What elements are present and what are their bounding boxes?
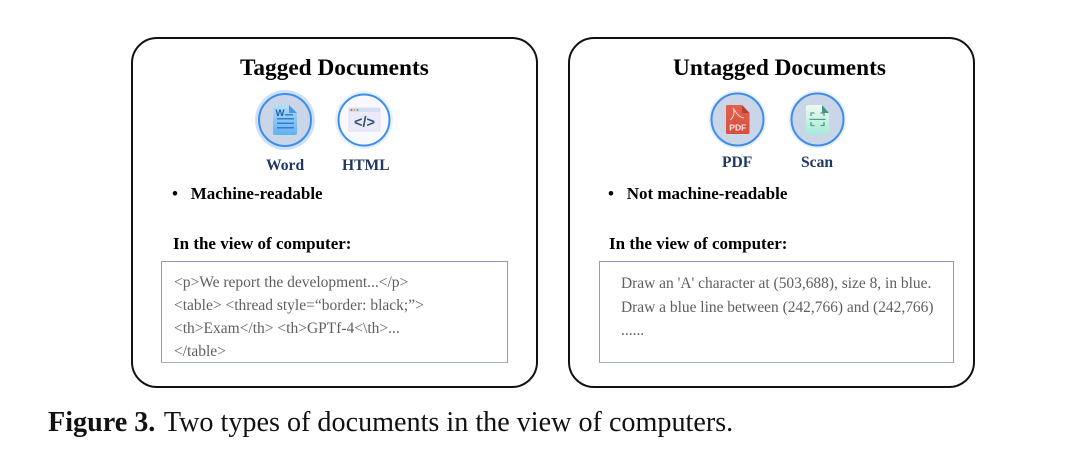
- icon: word: W: [276, 108, 284, 119]
- icon: html: [335, 91, 393, 149]
- bullet: machine-readable: • Machine-readable: [172, 184, 323, 203]
- code text: tagged: <table> <thread style=“border: black;”>: [174, 297, 424, 314]
- label: scan: Scan: [801, 154, 833, 171]
- panel: tagged documents: [131, 37, 538, 388]
- code text: tagged: [174, 274, 424, 360]
- heading: tagged documents: Tagged Documents: [240, 55, 429, 81]
- subheading: view of computer, tagged: In the view of computer:: [173, 234, 351, 253]
- caption: Figure 3. Two types of documents in the view of computers.: [48, 407, 733, 438]
- icon: word: [255, 90, 315, 150]
- bullet: not machine-readable: • Not machine-readable: [608, 184, 787, 203]
- label: html: HTML: [342, 157, 390, 174]
- heading: untagged documents: Untagged Documents: [673, 55, 886, 81]
- code text: untagged: Draw an 'A' character at (503,688), size 8, in blue.: [621, 275, 931, 292]
- label: pdf: PDF: [722, 154, 752, 171]
- code text: untagged: Draw a blue line between (242,766) and (242,766): [621, 298, 934, 316]
- code box: untagged: [599, 261, 954, 363]
- code text: untagged: [621, 275, 934, 339]
- panel: untagged documents: [568, 37, 975, 388]
- code box: tagged: [161, 261, 508, 363]
- code text: tagged: <th>Exam</th> <th>GPTf-4<\th>...: [174, 320, 400, 337]
- icon: html: </>: [354, 115, 375, 131]
- code text: tagged: </table>: [174, 343, 226, 360]
- label: word: Word: [266, 157, 304, 174]
- icon: pdf: PDF: [729, 122, 746, 132]
- subheading: view of computer, untagged: In the view of computer:: [609, 234, 787, 253]
- icon: pdf: [708, 90, 766, 148]
- icon: scan: [788, 90, 846, 148]
- code text: untagged: ......: [621, 322, 644, 339]
- code text: tagged: <p>We report the development...</p>: [174, 274, 408, 291]
